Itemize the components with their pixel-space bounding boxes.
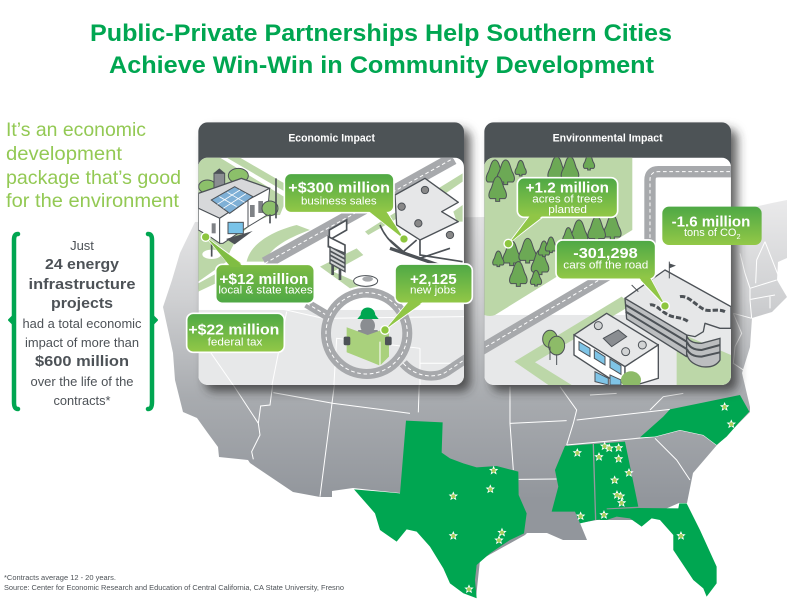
title: Achieve Win-Win in Community Development: [109, 52, 654, 79]
road: [265, 158, 453, 263]
town hall with solar roof: [198, 168, 278, 257]
western state lines: [230, 380, 410, 497]
footnote: Source: Center for Economic Research and Education of Central California, CA State University, Fresno: [4, 585, 344, 592]
callout: -1.6 million: tons of CO: [684, 227, 736, 239]
north-east state lines: [733, 242, 780, 370]
callout: +1.2 million: planted: [548, 204, 587, 216]
callout: +$300 million: business sales: [301, 196, 377, 208]
Florida: [600, 503, 717, 597]
callout: -1.6 million: [662, 207, 762, 245]
car: [354, 276, 378, 286]
panel header: environmental: Environmental Impact: [553, 133, 663, 145]
callout: +$12 million: +$12 million: [219, 271, 308, 288]
callout: +$300 million: [284, 173, 408, 243]
summary text: contracts*: [54, 393, 110, 408]
Mississippi: [552, 444, 595, 523]
shopping building: [380, 178, 463, 267]
callout: +$22 million: federal tax: [208, 336, 263, 348]
callout: -301,298: [556, 240, 669, 310]
Texas: [354, 421, 527, 598]
summary text: [22, 238, 142, 408]
footnote: [4, 575, 344, 592]
callout: -1.6 million: 2: [736, 232, 741, 241]
summary text: had a total economic: [22, 316, 142, 331]
road: [475, 172, 738, 353]
worker with map: [344, 307, 392, 366]
callout: +$12 million: [201, 233, 314, 303]
lead text: development: [6, 143, 123, 165]
trees: [486, 154, 621, 286]
footnote: *Contracts average 12 - 20 years.: [4, 575, 116, 582]
callout: +2,125 new jobs: [381, 264, 472, 334]
parking garage: [625, 262, 731, 367]
summary text: infrastructure: [28, 276, 136, 293]
callout: +1.2 million: [504, 178, 618, 248]
US map: [163, 200, 787, 598]
North Carolina: [640, 395, 749, 445]
forest ground: [484, 158, 632, 316]
summary text: over the life of the: [30, 374, 134, 389]
summary text: impact of more than: [25, 335, 139, 350]
summary text: Just: [70, 238, 94, 253]
callout: -1.6 million: -1.6 million: [672, 213, 750, 230]
lead text: for the environment: [6, 190, 180, 212]
summary text: projects: [51, 295, 113, 312]
panel: economic impact: [187, 122, 475, 395]
lower lot: [514, 297, 731, 385]
lead text: It’s an economic: [6, 119, 146, 141]
callout: +2,125 new jobs: new jobs: [410, 285, 457, 297]
callout: +$22 million: [187, 313, 284, 352]
title: Public-Private Partnerships Help Southern Cities: [90, 20, 672, 47]
right bracket: [148, 234, 157, 409]
callout: +1.2 million: +1.2 million: [526, 180, 609, 197]
callout: +$12 million: local & state taxes: [218, 285, 313, 297]
panel: environmental impact: [475, 122, 762, 389]
callout: +2,125 new jobs: +2,125: [410, 271, 457, 288]
southern states: [354, 380, 749, 598]
summary text: $600 million: [35, 353, 129, 370]
lead text: package that’s good: [6, 167, 181, 189]
title: [90, 20, 672, 79]
callout: +1.2 million: acres of trees: [532, 194, 603, 206]
left bracket: [9, 234, 18, 409]
callout: +$22 million: +$22 million: [188, 322, 279, 339]
lawn: [198, 158, 463, 292]
callout: +$300 million: +$300 million: [288, 180, 390, 197]
sign tower: [328, 220, 347, 280]
project stars: [449, 402, 736, 593]
Alabama: [594, 442, 638, 520]
callout: -301,298: -301,298: [573, 245, 638, 262]
summary text: 24 energy: [45, 256, 120, 273]
callout: -301,298: cars off the road: [563, 260, 648, 272]
lead text: [6, 119, 181, 212]
roundabout: [307, 293, 467, 376]
panel header: economic: Economic Impact: [288, 133, 375, 145]
office building: [543, 313, 658, 389]
